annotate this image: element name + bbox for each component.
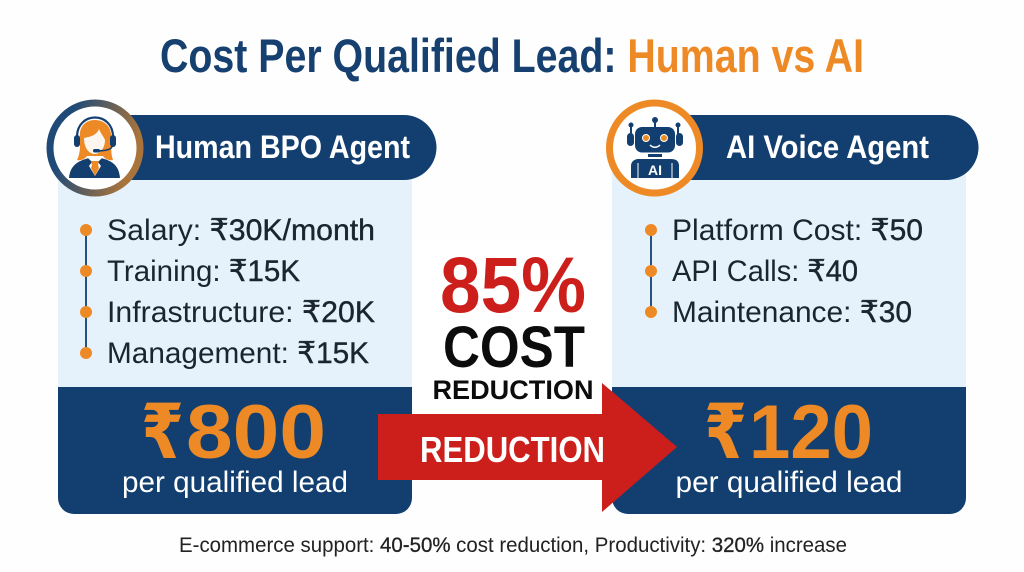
icon: AI robot: AI [648,162,662,178]
text block: human cost list: Training: ₹15K [107,255,300,288]
title: Cost Per Qualified Lead: Human vs AI [160,29,864,82]
callout: 85% cost reduction: COST [443,315,585,380]
text block: AI cost list [672,214,923,329]
cost box: human: per qualified lead [122,466,348,499]
panel header: human [130,115,436,180]
panel body: AI costs [612,170,966,390]
arrow: reduction [378,383,677,512]
text block: human cost list [107,214,375,370]
cost box: human: 800 [186,390,326,475]
text block: AI cost list: Maintenance: ₹30 [672,296,912,329]
cost box: human [58,387,412,514]
cost box: AI: per qualified lead [676,466,902,499]
text block: AI cost list: Platform Cost: ₹50 [672,214,923,247]
icon: human agent with headset [50,103,140,193]
timeline: AI bullets [645,224,657,318]
panel header: AI [690,115,978,180]
text block: human cost list: Infrastructure: ₹20K [107,296,375,329]
callout: 85% cost reduction: 85% [440,240,586,329]
text block: human cost list: Management: ₹15K [107,337,369,370]
panel header: AI: AI Voice Agent [726,129,929,165]
callout: 85% cost reduction [412,240,612,415]
text block: AI cost list: API Calls: ₹40 [672,255,858,288]
cost box: AI [612,387,966,514]
text block: human cost list: Salary: ₹30K/month [107,214,375,247]
footer note: E-commerce support: 40-50% cost reduction, Productivity: 320% increase [179,534,847,557]
panel: AI Voice Agent [610,103,978,514]
panel header: human: Human BPO Agent [155,129,410,165]
cost box: human: ₹ [141,390,184,475]
cost box: AI: 120 [749,390,873,475]
arrow: reduction: REDUCTION [420,429,605,470]
cost box: AI: ₹ [704,390,747,475]
icon: AI robot [610,103,700,193]
panel body: human costs [58,170,412,390]
timeline: human bullets [80,224,92,359]
panel: Human BPO Agent [50,103,436,514]
callout: 85% cost reduction: REDUCTION [432,375,594,405]
